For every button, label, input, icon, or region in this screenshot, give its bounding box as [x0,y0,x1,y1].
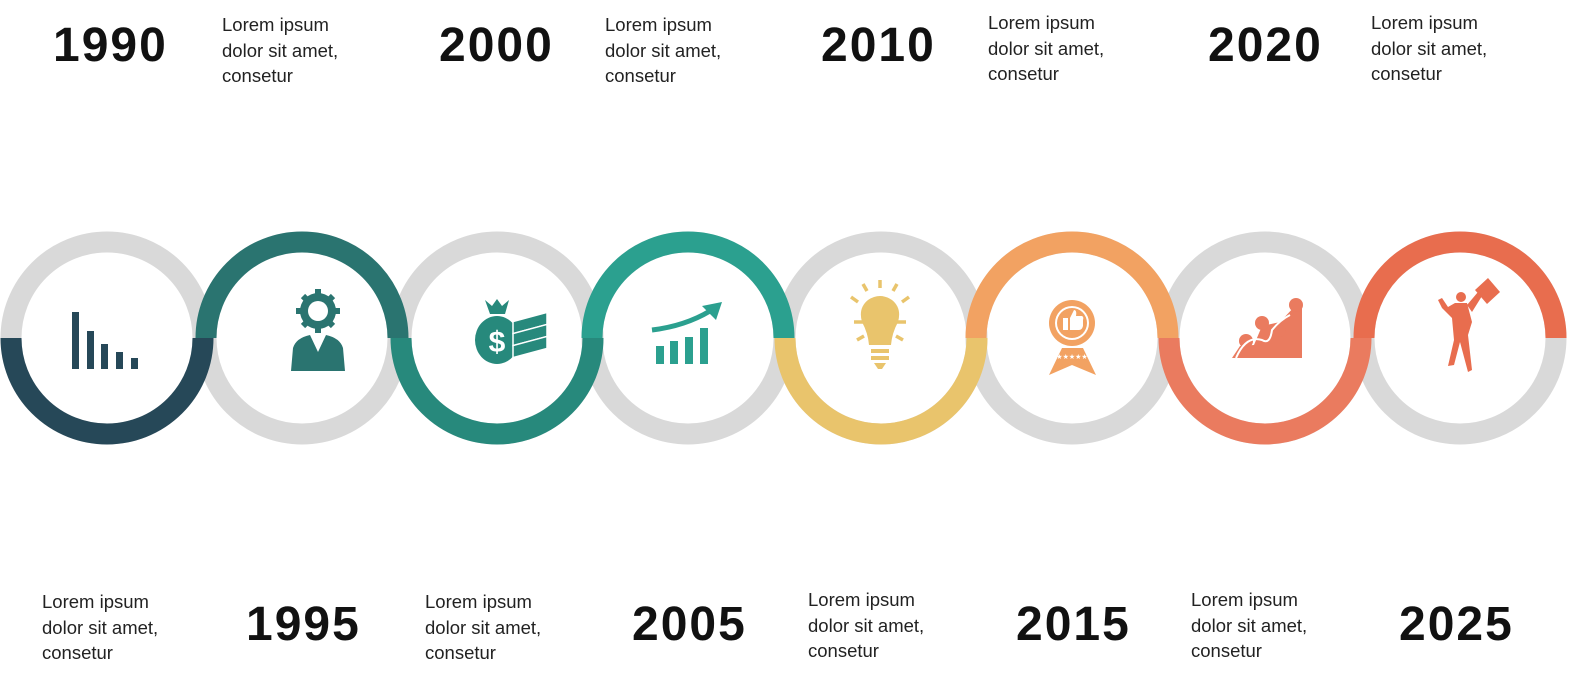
text 2020: consetur [1371,63,1442,84]
text 2015: consetur [808,640,879,661]
text 2000: Lorem ipsum [605,14,712,35]
text 2025: Lorem ipsum [1191,589,1298,610]
year 1995: 1995 [246,598,361,651]
text 1990: consetur [222,65,293,86]
icon: award badge: ★★★★★ [1056,353,1088,361]
icon: celebrating businessman [1438,278,1500,372]
year 2020: 2020 [1208,19,1323,72]
text 2015 [808,589,924,661]
text 1995 [42,591,158,663]
text 1995: Lorem ipsum [42,591,149,612]
text 2010: consetur [988,63,1059,84]
icon: money bag and cash: $ [489,326,506,359]
text 2005: Lorem ipsum [425,591,532,612]
text 2020: dolor sit amet, [1371,38,1487,58]
text 2015: dolor sit amet, [808,614,924,636]
text 1995: consetur [42,642,113,663]
year 2005: 2005 [632,598,747,651]
text 2025: consetur [1191,640,1262,661]
text 2000 [605,14,721,86]
text 2025: dolor sit amet, [1191,614,1307,636]
text 2010: Lorem ipsum [988,12,1095,33]
year 2010: 2010 [821,19,936,72]
text 2000: dolor sit amet, [605,40,721,60]
icon: declining bars [72,312,138,369]
text 2025 [1191,589,1307,661]
text 1990: dolor sit amet, [222,40,338,60]
year 2015: 2015 [1016,598,1131,651]
icon: rising path chart [1232,298,1303,358]
text 2020: Lorem ipsum [1371,12,1478,33]
year 1990: 1990 [53,19,168,72]
text 2015: Lorem ipsum [808,589,915,610]
text 2005: consetur [425,642,496,663]
text 2000: consetur [605,65,676,86]
icon: light bulb [851,280,909,369]
text 2005 [425,591,541,663]
year 2025: 2025 [1399,598,1514,651]
icon: award badge [1049,300,1096,375]
text 1990: Lorem ipsum [222,14,329,35]
text 2010 [988,12,1104,84]
text 1990 [222,14,338,86]
year 2000: 2000 [439,19,554,72]
text 2005: dolor sit amet, [425,616,541,638]
text 1995: dolor sit amet, [42,616,158,638]
icon: money bag and cash [475,299,547,364]
icon: growth chart [652,302,722,364]
text 2020 [1371,12,1487,84]
text 2010: dolor sit amet, [988,38,1104,58]
icon: gear person [291,289,345,371]
